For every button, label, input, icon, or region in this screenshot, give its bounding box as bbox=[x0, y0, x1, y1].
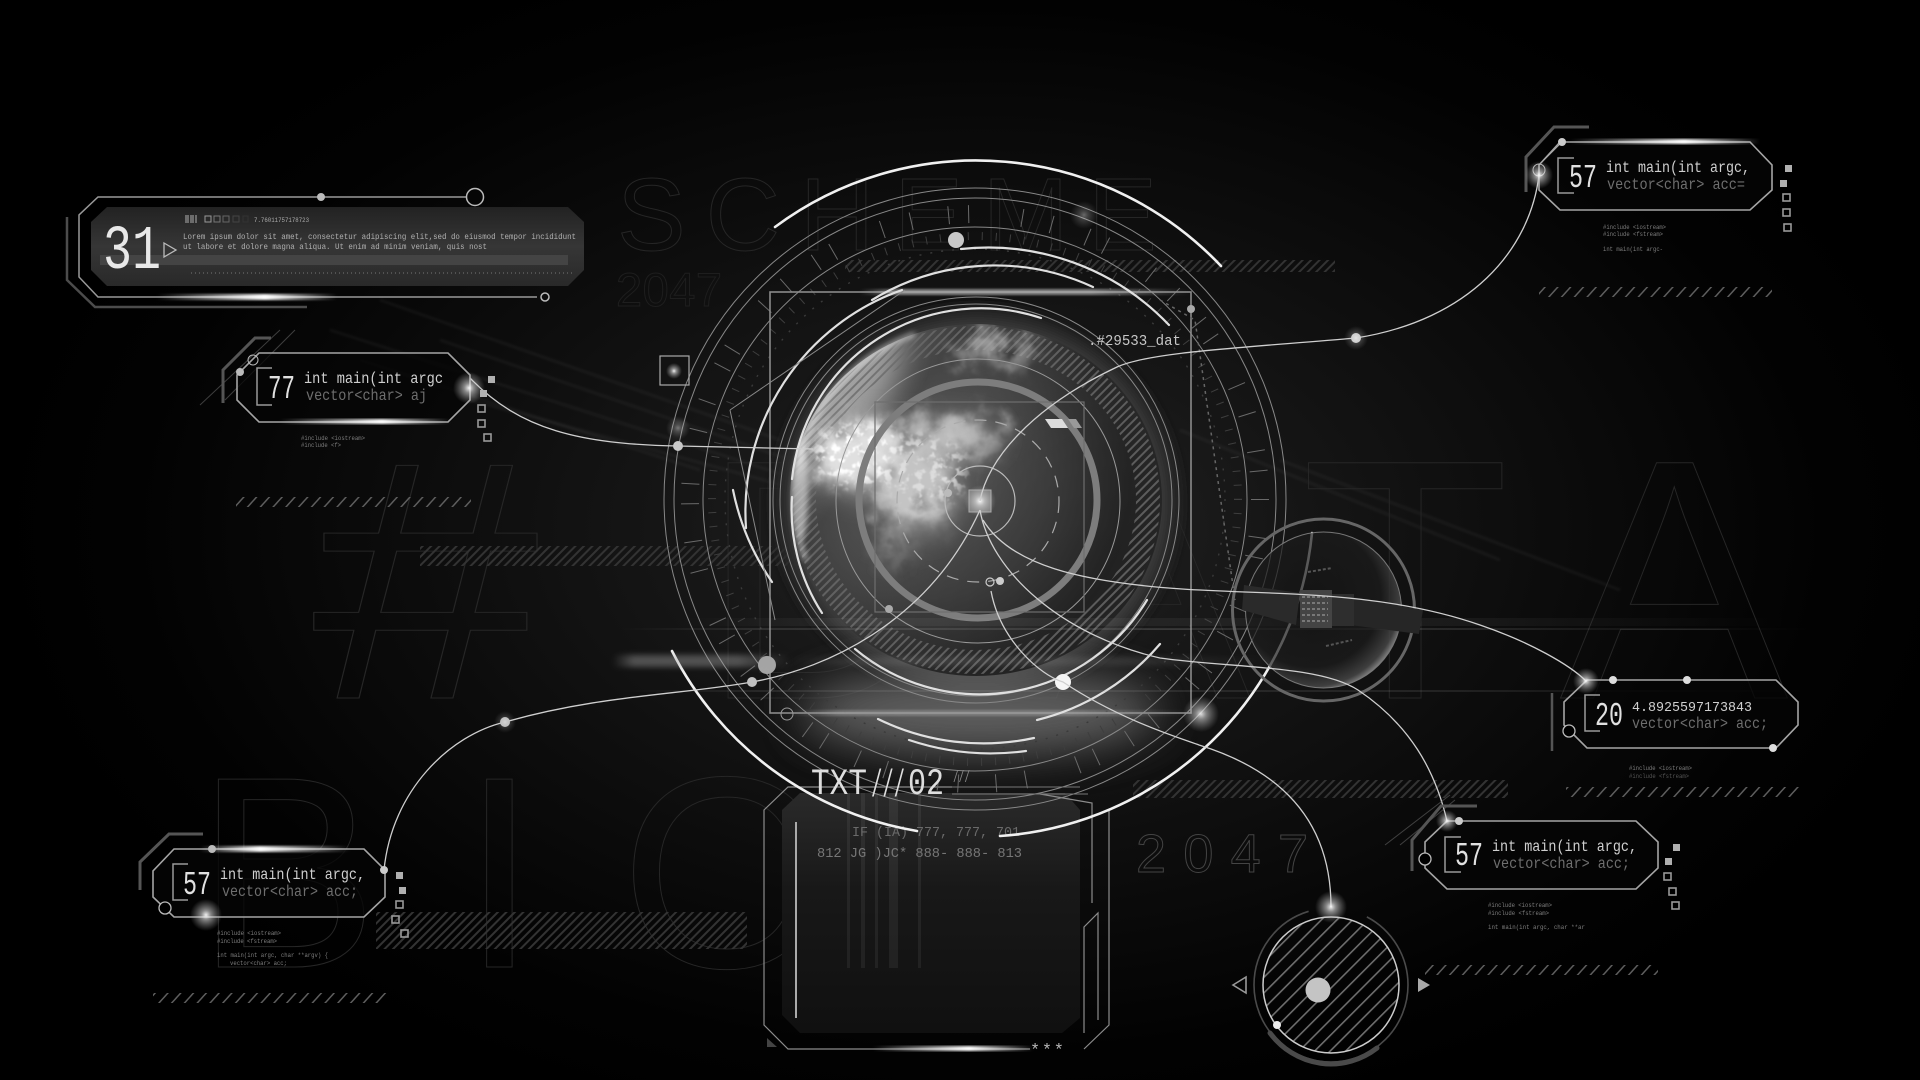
cloud bright crags bbox=[814, 425, 965, 504]
top glow bbox=[200, 846, 350, 852]
include note: #include <f> bbox=[301, 442, 341, 449]
panel: lower right 57 bbox=[1385, 795, 1680, 975]
box text row 2: 812 JG )JC* 888- 888- 813 bbox=[817, 846, 1022, 862]
glow on bottom line bbox=[157, 294, 337, 300]
box text row 1: IF (IA) 777, 777, 701 bbox=[852, 825, 1020, 841]
small slashes: /// bbox=[953, 769, 970, 788]
code value: 7.76011757178723 bbox=[254, 217, 309, 224]
heading: TXT 02: /// bbox=[871, 765, 905, 808]
code line 1: int main(int argc, bbox=[1606, 159, 1750, 177]
right arrow bbox=[1418, 978, 1430, 992]
hexagon bbox=[237, 353, 470, 422]
cloud mass bbox=[815, 339, 1037, 565]
horizontal light bands bbox=[612, 618, 1810, 692]
corner marker bbox=[767, 1038, 777, 1047]
panel: 77 code bbox=[200, 330, 495, 507]
nodes bbox=[159, 845, 388, 931]
code line 2: vector<char> acc= bbox=[1607, 176, 1745, 194]
lens disc bbox=[1246, 532, 1402, 688]
gray bracket bbox=[1526, 127, 1589, 192]
glow node bbox=[453, 372, 485, 404]
code line 1: int main(int argc, bbox=[220, 866, 365, 884]
include note bbox=[1488, 902, 1585, 931]
heading number: 02 bbox=[908, 764, 944, 806]
top glow bbox=[1570, 139, 1760, 144]
bottom glow line bbox=[873, 1046, 1033, 1051]
hatch strip bbox=[1566, 787, 1799, 797]
bracket bbox=[1585, 695, 1600, 731]
side squares bbox=[1664, 844, 1680, 909]
label: dat code: .#29533_dat bbox=[1088, 333, 1181, 350]
panel: bottom left 57 bbox=[140, 834, 408, 1003]
value line: 4.8925597173843 bbox=[1632, 700, 1752, 716]
box fill bbox=[782, 793, 1080, 1033]
hatch strip bbox=[1425, 965, 1658, 975]
barcode bbox=[186, 215, 248, 223]
include note: vector<char> acc; bbox=[230, 960, 287, 967]
nodes bbox=[1525, 138, 1566, 189]
radar nodes bbox=[666, 201, 1219, 732]
halo behind earth bbox=[765, 299, 1189, 707]
include note: #include <iostream> bbox=[1629, 765, 1692, 772]
top dot bbox=[317, 193, 325, 201]
panel: bottom text box bbox=[764, 787, 1109, 1061]
number: 77 bbox=[268, 371, 295, 408]
outer bracket bbox=[67, 217, 307, 307]
inner square bbox=[875, 402, 1084, 612]
bottom circle bbox=[541, 293, 549, 301]
gray bracket bbox=[1412, 806, 1477, 871]
include note: int main(int argc, char **ar bbox=[1488, 924, 1585, 931]
white data rectangles bbox=[1045, 419, 1082, 428]
ghost year right: 2047 bbox=[1136, 824, 1308, 884]
play triangle bbox=[164, 243, 176, 257]
number: 57 bbox=[183, 867, 211, 904]
sun flare on rim bbox=[796, 440, 808, 540]
dashed connector bbox=[1160, 300, 1235, 600]
ghost word: BIO: BIO bbox=[196, 720, 833, 1025]
white node bbox=[1273, 1021, 1281, 1029]
thin outer rings bbox=[664, 188, 1286, 810]
hatched ring bbox=[804, 338, 1148, 662]
square frame bbox=[770, 292, 1191, 713]
bracket bbox=[1558, 158, 1574, 193]
gray fill bbox=[91, 207, 584, 286]
nodes bbox=[1419, 810, 1463, 865]
bright rim arc bbox=[794, 334, 915, 560]
code line 2: vector<char> acc; bbox=[222, 883, 358, 901]
hexagon bbox=[153, 849, 385, 917]
include note: #include <iostream> bbox=[1603, 224, 1666, 231]
include note bbox=[217, 930, 328, 967]
wedge line bbox=[730, 290, 905, 620]
streaks bbox=[1385, 795, 1455, 845]
heading: TXT 02 bbox=[811, 764, 1088, 808]
bracket bbox=[173, 864, 188, 900]
lower glow under earth bbox=[800, 670, 1160, 754]
code line 2: vector<char> acc; bbox=[1493, 855, 1630, 873]
outer ring bbox=[1254, 908, 1408, 1062]
side squares bbox=[1780, 165, 1792, 231]
side squares bbox=[392, 872, 408, 937]
top glow node bbox=[1315, 891, 1347, 923]
gray bar bbox=[1551, 693, 1553, 751]
panel: 31 lorem bbox=[67, 188, 584, 307]
include note: #include <fstream> bbox=[217, 938, 277, 945]
number: 20 bbox=[1595, 698, 1623, 735]
upper-left sunlit atmosphere bbox=[791, 335, 916, 484]
code line 2: vector<char> aj bbox=[306, 387, 427, 405]
dotted rule bbox=[191, 272, 573, 274]
outline bbox=[79, 197, 537, 297]
number: 57 bbox=[1569, 160, 1597, 197]
side squares bbox=[478, 376, 495, 441]
streaks bbox=[200, 330, 295, 405]
inner rings bbox=[836, 359, 1120, 643]
thick bottom arc bbox=[1270, 1033, 1377, 1064]
center dot bbox=[1306, 978, 1330, 1002]
gray bracket bbox=[223, 338, 271, 403]
earth globe bbox=[788, 324, 1162, 676]
heading rules bbox=[952, 787, 1088, 794]
include note bbox=[1629, 765, 1692, 780]
include note bbox=[301, 435, 365, 449]
ghost symbol: hash: # bbox=[312, 391, 542, 771]
ghost word: DATA: DATA bbox=[700, 389, 1790, 771]
include note: #include <iostream> bbox=[1488, 902, 1552, 909]
number: 57 bbox=[1455, 838, 1483, 875]
hatched disc bbox=[1263, 917, 1399, 1053]
frame glow lines bbox=[790, 289, 1190, 716]
include note: #include <fstream> bbox=[1629, 773, 1689, 780]
bottom glow bbox=[280, 419, 450, 424]
code line 1: int main(int argc, bbox=[1492, 838, 1637, 856]
satellite body bbox=[1242, 568, 1423, 646]
left arrow bbox=[1233, 977, 1246, 993]
heading text: TXT bbox=[811, 764, 867, 806]
ghost year left: 2047 bbox=[616, 263, 722, 316]
soft cloud base bbox=[813, 421, 997, 533]
bracket bbox=[1445, 837, 1461, 872]
include note: #include <iostream> bbox=[217, 930, 281, 937]
connector curves bbox=[384, 175, 1586, 907]
number: 31 bbox=[103, 216, 161, 287]
lorem line 2: ut labore et dolore magna aliqua. Ut enim ad minim veniam, quis nost bbox=[183, 243, 487, 252]
panel: right 20 bbox=[1552, 668, 1799, 797]
hatch strip bbox=[1539, 287, 1772, 297]
top-left nodes bbox=[236, 355, 258, 376]
nodes bbox=[1563, 668, 1777, 752]
include note: int main(int argc, char **argv) { bbox=[217, 952, 328, 959]
background light streaks bbox=[330, 300, 1620, 590]
white arcs bbox=[672, 160, 1312, 836]
ghost bars bbox=[847, 793, 921, 968]
panel: top right 57 bbox=[1525, 127, 1792, 297]
hexagon bbox=[1539, 142, 1772, 210]
dots on connector curves bbox=[494, 326, 1368, 733]
hexagon bbox=[1564, 680, 1798, 748]
stars: *** bbox=[1030, 1042, 1064, 1061]
include note bbox=[1603, 224, 1666, 253]
small square marker bbox=[660, 356, 689, 385]
satellite lens bbox=[1232, 519, 1423, 701]
dial control bbox=[1233, 891, 1430, 1064]
hatched background strips bbox=[376, 260, 1508, 949]
code line 1: int main(int argc bbox=[304, 370, 443, 388]
lens rings bbox=[1232, 519, 1414, 701]
ghost title: SCHEME: SCHEME bbox=[617, 157, 1157, 272]
include note: #include <fstream> bbox=[1603, 231, 1663, 238]
gray bracket bbox=[140, 834, 203, 890]
hatch strip bbox=[236, 497, 471, 507]
code line 2: vector<char> acc; bbox=[1632, 715, 1768, 733]
include note: #include <fstream> bbox=[1488, 910, 1549, 917]
include note: int main(int argc- bbox=[1603, 246, 1663, 253]
inner band bbox=[100, 255, 568, 265]
radial ticks bbox=[690, 214, 1260, 784]
lorem line 1: Lorem ipsum dolor sit amet, consectetur adipiscing elit,sed do eiusmod tempor incididunt bbox=[183, 233, 576, 242]
hexagon bbox=[1425, 821, 1658, 889]
box outline bbox=[764, 787, 1109, 1049]
box left rule bbox=[795, 822, 797, 1018]
hatch strip bbox=[153, 993, 387, 1003]
main radar bbox=[660, 160, 1312, 836]
top circle bbox=[466, 188, 484, 206]
center target bbox=[964, 485, 996, 517]
include note: #include <iostream> bbox=[301, 435, 365, 442]
bracket bbox=[257, 368, 272, 405]
